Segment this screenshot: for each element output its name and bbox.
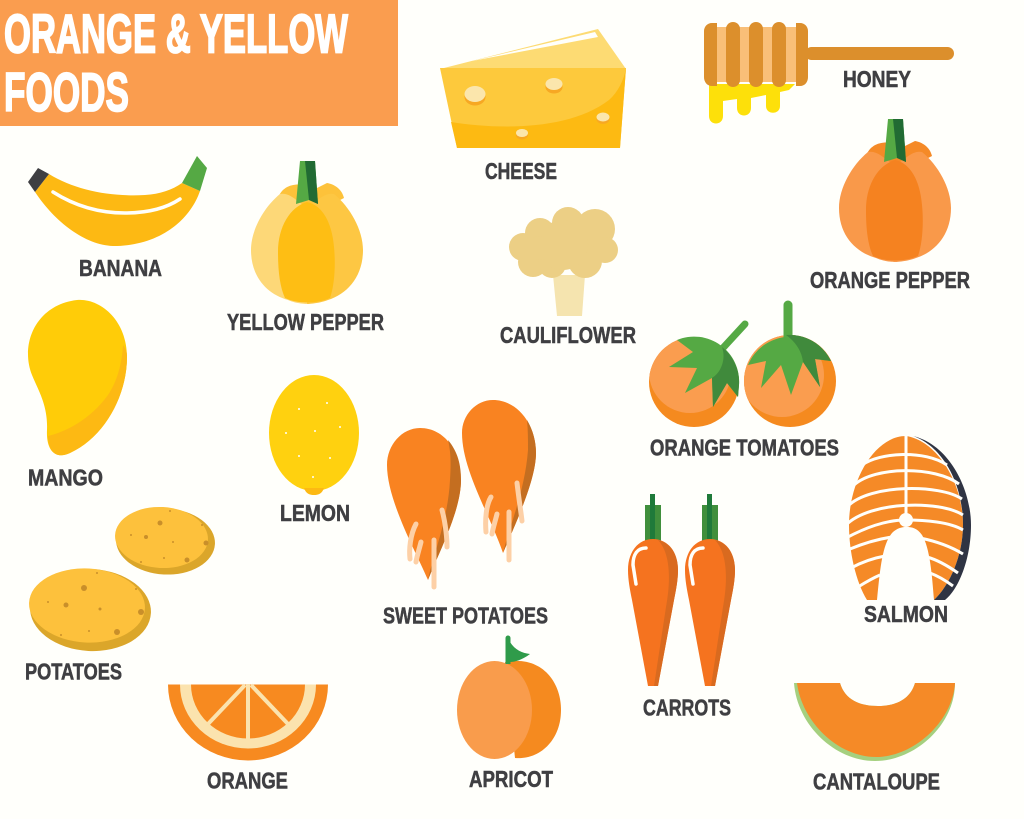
mango label: MANGO <box>28 464 103 490</box>
orange tomatoes <box>649 305 839 460</box>
cantaloupe <box>794 683 955 794</box>
cheese <box>440 29 626 184</box>
title <box>4 2 348 123</box>
potatoes <box>25 505 217 684</box>
carrots <box>628 494 735 720</box>
cheese label: CHEESE <box>485 158 557 184</box>
cauliflower label: CAULIFLOWER <box>500 322 636 348</box>
title banner <box>0 0 398 126</box>
honey dipper <box>704 22 954 124</box>
orange label: ORANGE <box>207 768 288 794</box>
sweet potatoes label: SWEET POTATOES <box>383 602 548 628</box>
orange pepper <box>810 119 970 293</box>
carrots label: CARROTS <box>643 694 731 720</box>
lemon label: LEMON <box>280 500 350 526</box>
lemon <box>269 375 359 526</box>
title: ORANGE & YELLOW <box>4 2 348 64</box>
honey label: HONEY <box>843 66 911 92</box>
yellow pepper label: YELLOW PEPPER <box>227 309 384 335</box>
orange pepper label: ORANGE PEPPER <box>810 267 970 293</box>
orange slice <box>168 684 328 794</box>
yellow pepper <box>227 161 384 335</box>
apricot label: APRICOT <box>469 766 554 792</box>
sweet potatoes <box>383 400 548 628</box>
orange tomatoes label: ORANGE TOMATOES <box>650 434 839 460</box>
banana label: BANANA <box>79 255 162 281</box>
mango <box>28 300 127 490</box>
title: FOODS <box>4 61 129 123</box>
apricot <box>457 636 561 792</box>
salmon <box>846 436 971 627</box>
cantaloupe label: CANTALOUPE <box>813 768 940 794</box>
cauliflower <box>500 207 636 348</box>
salmon label: SALMON <box>864 601 948 627</box>
potatoes label: POTATOES <box>25 658 122 684</box>
banana <box>28 156 207 281</box>
